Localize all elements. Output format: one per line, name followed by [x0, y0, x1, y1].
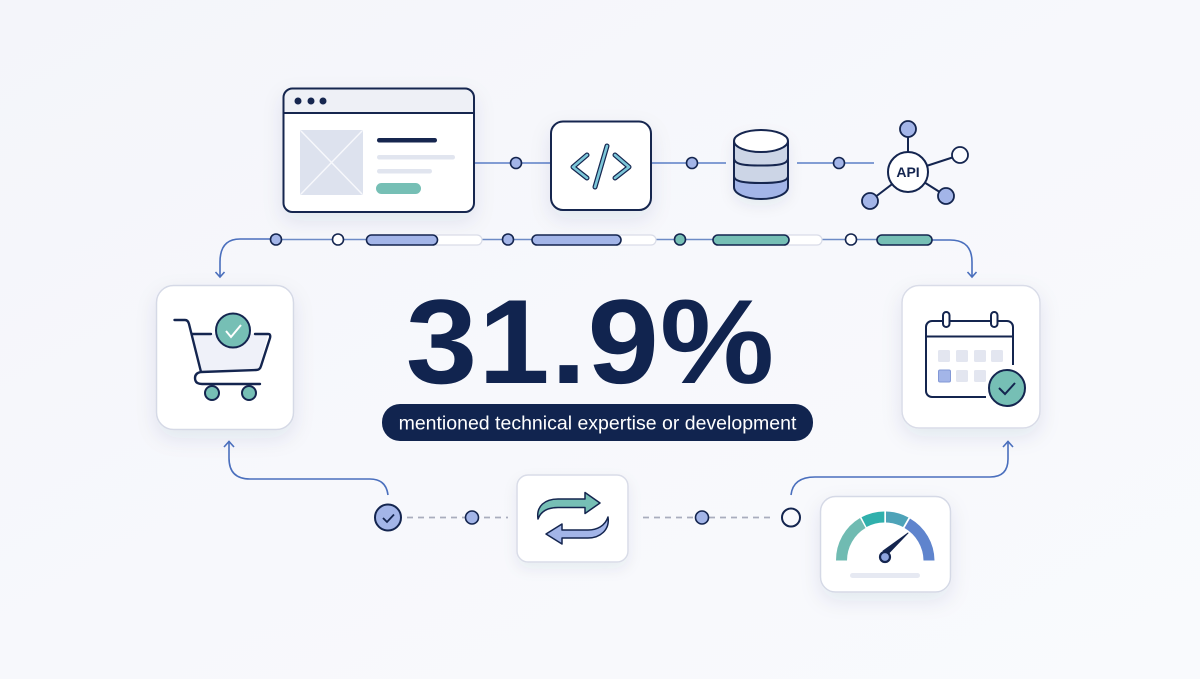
panel: swap arrows: [517, 475, 628, 562]
panel: calendar: [902, 286, 1040, 428]
icon: API hub: API: [896, 164, 920, 180]
big statistic: 31.9%: [406, 276, 775, 409]
panel: shopping cart: [156, 286, 294, 430]
dashed connectors and nodes: [375, 504, 800, 530]
arrow: check node to cart: [224, 441, 388, 495]
panel: speed gauge: [820, 496, 950, 592]
icon: browser window: [284, 88, 474, 212]
icon: calendar: [926, 312, 1025, 406]
connectors between top row icons: [474, 158, 874, 168]
icon: code tag box: [551, 122, 651, 210]
caption pill: mentioned technical expertise or development: [399, 412, 797, 434]
icon: gauge: [836, 512, 934, 578]
icon: API hub: [862, 121, 968, 209]
icon: cart: [174, 314, 270, 400]
progress timeline with arrows: [216, 234, 976, 277]
caption pill: [382, 404, 813, 441]
icon: database: [734, 130, 788, 199]
icon: swap arrows: [538, 492, 608, 544]
arrow: gauge node to calendar: [791, 441, 1013, 495]
